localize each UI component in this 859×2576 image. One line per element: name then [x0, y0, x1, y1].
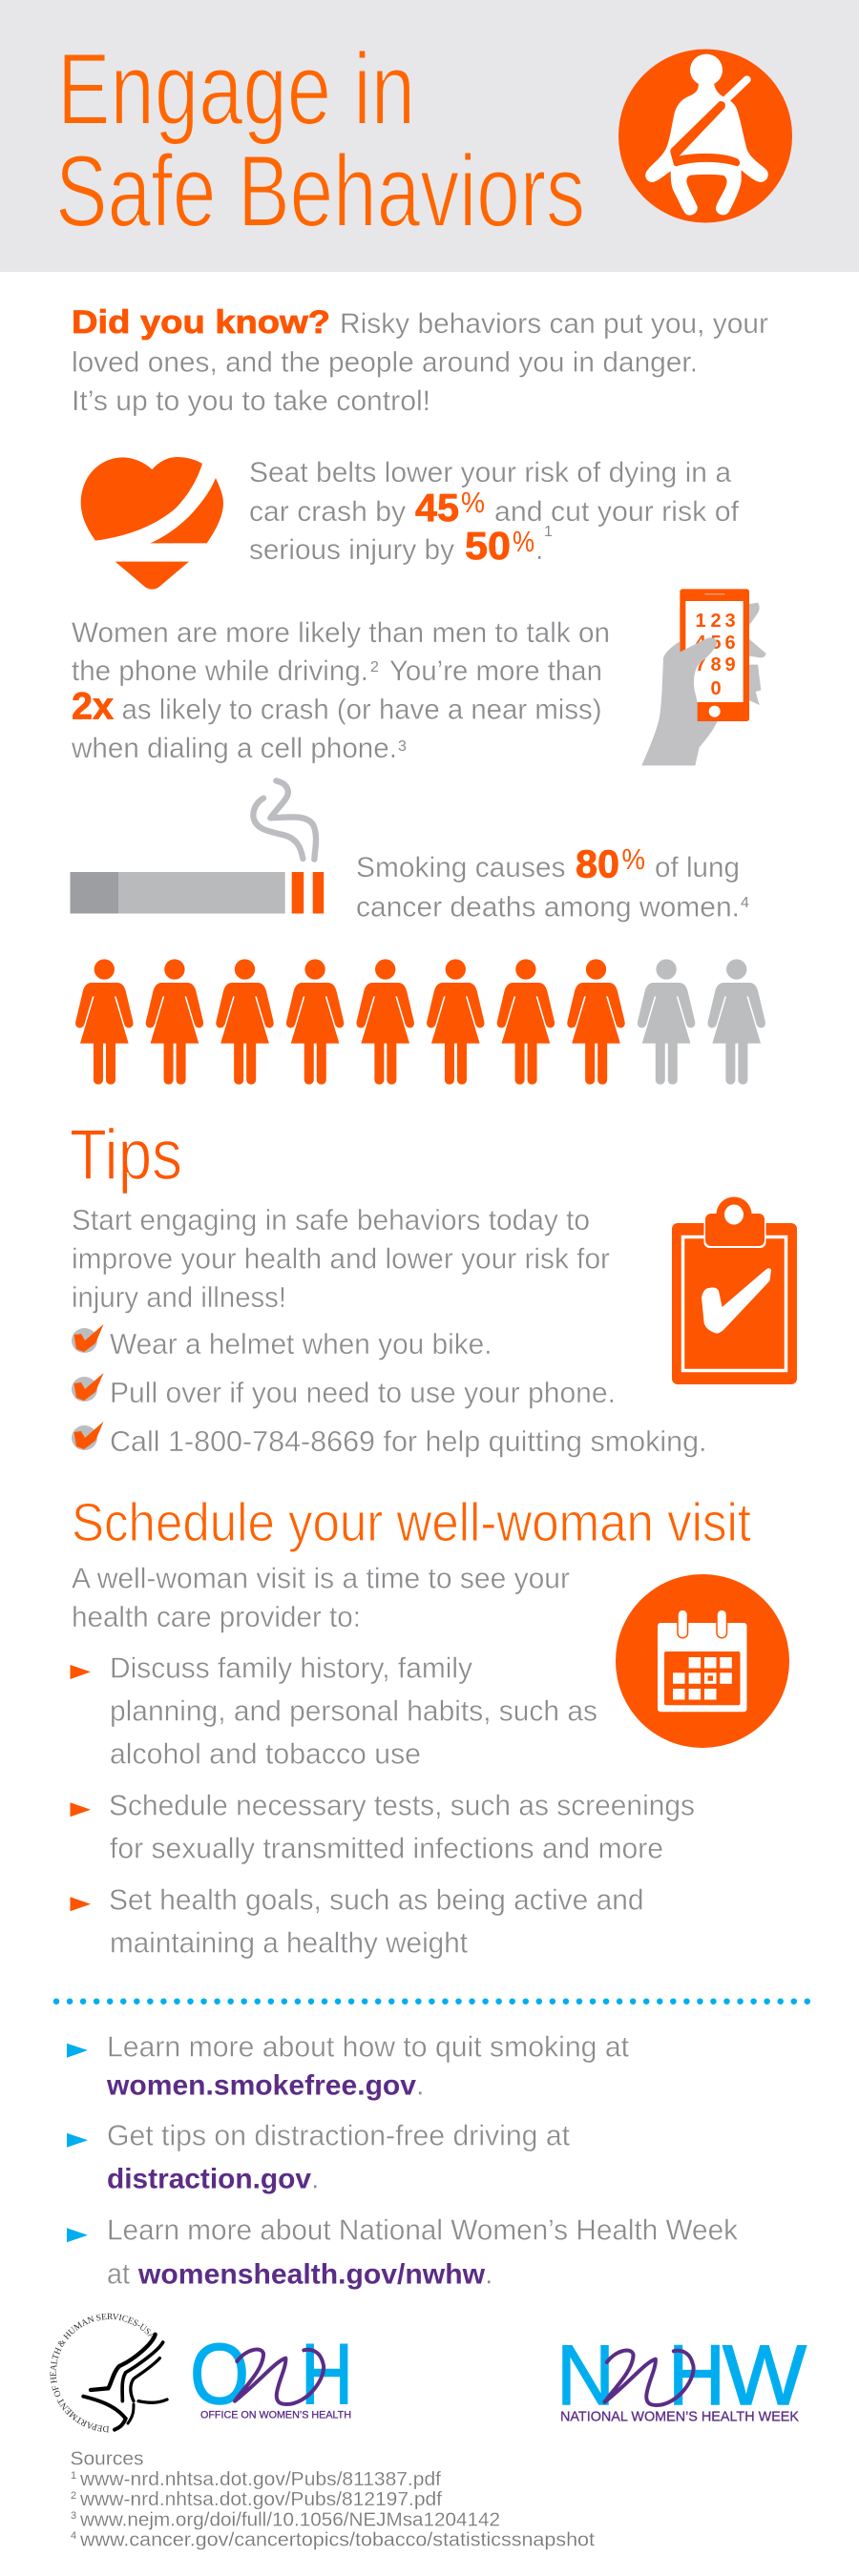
text: seat belt statistics: car crash by — [249, 496, 406, 528]
link: quit smoking — [67, 2031, 630, 2102]
link: distraction-free driving: Get tips on distraction-free driving at — [107, 2119, 571, 2151]
icon: seat belt — [618, 50, 792, 223]
icon: hand holding phone: 9 — [724, 654, 736, 675]
logo: National Women's Health Week: H — [668, 2327, 725, 2422]
text: seat belt statistics: % — [461, 486, 485, 519]
sources: www.cancer.gov/cancertopics/tobacco/statisticssnapshot — [79, 2528, 595, 2550]
title: Safe Behaviors — [55, 134, 585, 248]
text: phone statistics: as likely to crash (or have a near miss) — [122, 695, 601, 725]
sources: www-nrd.nhtsa.dot.gov/Pubs/812197.pdf — [79, 2488, 442, 2510]
text: well-woman intro — [72, 1563, 570, 1633]
icon: hand holding phone: 2 — [710, 611, 722, 632]
pictogram: 8 of 10 women — [75, 959, 765, 1085]
intro text: Did you know: It’s up to you to take control! — [72, 385, 430, 417]
logo: Office on Women's Health: OFFICE ON WOMEN’S HEALTH — [200, 2410, 351, 2421]
icon: calendar — [616, 1574, 789, 1748]
text: smoking statistic: Smoking causes — [356, 852, 565, 883]
text: smoking statistic: 80 — [576, 841, 619, 885]
bullet: necessary tests: for sexually transmitted infections and more — [110, 1833, 663, 1865]
text: phone statistics: 2 — [370, 659, 379, 675]
icon: heart with seat belt — [81, 457, 223, 590]
bullet: necessary tests: Schedule necessary tests, such as screenings — [109, 1790, 695, 1822]
text: phone statistics: 3 — [398, 738, 407, 755]
bullet: family history: planning, and personal habits, such as — [110, 1694, 597, 1727]
sources: 2 — [71, 2490, 76, 2502]
bullet: necessary tests — [71, 1790, 695, 1865]
checklist: phone: Pull over if you need to use your phone. — [110, 1377, 616, 1409]
text: smoking statistic: cancer deaths among women. — [356, 891, 740, 924]
sources: 1 — [71, 2470, 76, 2482]
text: phone statistics: Women are more likely than men to talk on — [72, 617, 610, 649]
text: seat belt statistics: 45 — [415, 486, 459, 530]
text: tips intro: Start engaging in safe behaviors today to — [72, 1204, 590, 1236]
intro text: Did you know: Did you know? — [72, 304, 330, 341]
text: seat belt statistics: . — [535, 534, 543, 566]
text: seat belt statistics — [249, 457, 740, 568]
text: smoking statistic — [356, 841, 749, 924]
sources: 4 — [71, 2530, 76, 2542]
text: tips intro: injury and illness! — [72, 1281, 286, 1314]
icon: hand holding phone: 5 — [710, 633, 722, 654]
bullet: family history — [71, 1652, 597, 1770]
text: phone statistics: 2x — [72, 685, 114, 727]
title — [55, 31, 585, 248]
sources: 3 — [71, 2510, 76, 2522]
title: Engage in — [57, 31, 415, 146]
text: well-woman intro: A well-woman visit is a time to see your — [72, 1563, 570, 1595]
text: well-woman intro: health care provider to: — [72, 1601, 361, 1633]
logo: National Women's Health Week: NATIONAL WOMEN’S HEALTH WEEK — [560, 2409, 799, 2425]
sources: www-nrd.nhtsa.dot.gov/Pubs/811387.pdf — [79, 2468, 441, 2490]
text: seat belt statistics: Seat belts lower your risk of dying in a — [249, 457, 731, 488]
icon: hand holding phone: 6 — [724, 633, 736, 654]
icon: hand holding phone: 8 — [710, 654, 722, 675]
bullet: family history: alcohol and tobacco use — [110, 1737, 421, 1770]
text: seat belt statistics: % — [513, 525, 534, 558]
link: distraction-free driving — [67, 2119, 571, 2194]
logo: National Women's Health Week — [556, 2327, 807, 2425]
logo: Office on Women's Health — [190, 2327, 353, 2422]
text: phone statistics: You’re more than — [389, 655, 602, 687]
link: National Women's Health Week: Learn more about National Women’s Health Week — [107, 2214, 739, 2247]
icon: hand holding phone: 1 — [695, 611, 706, 632]
intro text: Did you know: Risky behaviors can put you, your — [340, 308, 768, 340]
checklist: quit line: Call 1-800-784-8669 for help quitting smoking. — [110, 1425, 706, 1458]
text: phone statistics — [71, 617, 610, 764]
text: tips intro: improve your health and lower your risk for — [72, 1242, 610, 1275]
icon: hand holding phone: 3 — [724, 611, 736, 632]
logo: National Women's Health Week: W — [723, 2327, 807, 2422]
icon: hand holding phone: 4 — [695, 633, 706, 654]
logo: Office on Women's Health: H — [301, 2327, 353, 2422]
text: smoking statistic: of lung — [655, 852, 740, 883]
logo: HHS seal: DEPARTMENT OF HEALTH & HUMAN SERVICES-USA — [50, 2313, 154, 2433]
bullet: health goals: maintaining a healthy weight — [110, 1927, 469, 1960]
sources — [71, 2447, 595, 2550]
link: distraction-free driving: . — [311, 2162, 319, 2194]
bullet: health goals: Set health goals, such as being active and — [109, 1884, 643, 1917]
text: smoking statistic: % — [622, 842, 645, 876]
link: quit smoking: women.smokefree.gov — [106, 2070, 417, 2102]
heading: Schedule your well-woman visit: Schedule your well-woman visit — [72, 1492, 751, 1553]
text: seat belt statistics: 50 — [465, 524, 511, 568]
icon: clipboard — [672, 1196, 797, 1384]
link: National Women's Health Week — [67, 2214, 739, 2290]
link: National Women's Health Week: at — [107, 2257, 130, 2290]
logo: Office on Women's Health: O — [190, 2327, 249, 2422]
text: phone statistics: the phone while driving. — [72, 655, 368, 687]
icon: cigarette — [71, 780, 324, 914]
checklist: helmet: Wear a helmet when you bike. — [110, 1328, 492, 1361]
sources: www.nejm.org/doi/full/10.1056/NEJMsa1204142 — [79, 2508, 500, 2530]
link: quit smoking: . — [416, 2069, 424, 2102]
link: National Women's Health Week: . — [485, 2257, 492, 2290]
link: quit smoking: Learn more about how to quit smoking at — [107, 2031, 630, 2064]
text: tips intro — [72, 1204, 610, 1314]
icon: hand holding phone: 7 — [695, 654, 706, 675]
sources: Sources — [71, 2447, 143, 2469]
text: seat belt statistics: serious injury by — [249, 534, 454, 566]
intro text: Did you know — [72, 304, 768, 417]
logo: National Women's Health Week: N — [556, 2327, 615, 2422]
bullet: family history: Discuss family history, family — [110, 1652, 473, 1684]
icon: hand holding phone: 0 — [710, 678, 722, 699]
text: smoking statistic: 4 — [741, 895, 749, 911]
bullet: health goals — [71, 1884, 643, 1960]
text: phone statistics: when dialing a cell phone. — [71, 733, 397, 764]
header band — [0, 0, 859, 272]
text: seat belt statistics: and cut your risk of — [494, 496, 740, 528]
link: distraction-free driving: distraction.gov — [107, 2163, 312, 2194]
text: seat belt statistics: 1 — [544, 524, 553, 540]
heading: Tips: Tips — [70, 1114, 182, 1195]
link: National Women's Health Week: womenshealth.gov/nwhw — [137, 2258, 485, 2290]
intro text: Did you know: loved ones, and the people around you in danger. — [72, 347, 698, 378]
icon: hand holding phone — [641, 589, 766, 765]
